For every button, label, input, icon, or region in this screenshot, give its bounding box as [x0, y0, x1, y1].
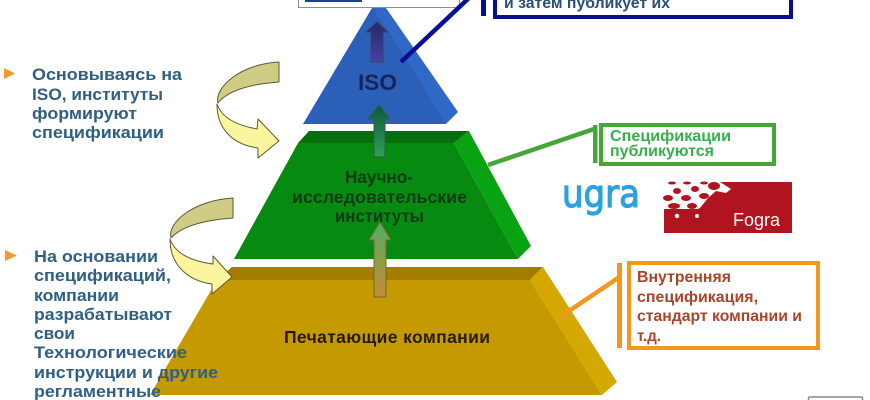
label: research institutes: Научно-: [345, 167, 413, 187]
text block: companies develop instructions: [5, 247, 218, 400]
text block: institutes form specifications: формируют: [32, 104, 137, 123]
arrow: institutes to ISO: [366, 22, 388, 62]
callout: internal specification: спецификация,: [637, 289, 758, 306]
label: research institutes: [292, 167, 467, 226]
panel: printing companies tier: [150, 267, 617, 395]
callout: internal specification: [617, 263, 818, 348]
label: ISO: ISO: [358, 70, 397, 95]
text block: institutes form specifications: спецификации: [32, 123, 164, 142]
callout: internal specification: т.д.: [637, 328, 661, 345]
callout: specifications are published: Спецификации: [610, 128, 731, 145]
callout: internal specification: Внутренняя: [637, 269, 731, 286]
logo: Fogra: [663, 182, 792, 233]
text block: companies develop instructions: Технологические: [34, 343, 187, 362]
label: research institutes: исследовательские: [292, 187, 467, 207]
connector: companies to orange box: [560, 278, 618, 317]
connector: institutes to green box: [488, 129, 594, 165]
text block: institutes form specifications: Основываясь на: [32, 65, 183, 84]
text block: institutes form specifications: [4, 65, 183, 142]
text block: institutes form specifications: ISO, институты: [32, 85, 163, 104]
connector: ISO to navy box: [401, 0, 470, 62]
curved arrow: ISO to institutes: [217, 62, 279, 158]
text block: companies develop instructions: разрабатывают: [34, 305, 172, 324]
callout: internal specification: стандарт компании и: [637, 308, 802, 325]
text block: companies develop instructions: инструкции и другие: [34, 363, 218, 382]
panel: ISO pyramid tier: [303, 8, 458, 124]
text block: companies develop instructions: компании: [34, 286, 119, 305]
curved arrow: institutes to companies: [170, 198, 233, 294]
logo: Fogra: Fogra: [733, 210, 781, 230]
top white box: [298, 0, 460, 8]
panel: research institutes tier: [234, 131, 531, 259]
arrow: ISO to institutes: [368, 105, 390, 157]
label: printing companies: Печатающие компании: [284, 327, 490, 347]
callout: specifications are published: [593, 125, 774, 164]
text block: companies develop instructions: На основании: [34, 247, 158, 266]
arrow: companies to institutes: [369, 222, 391, 297]
callout: specifications are published: публикуются: [610, 143, 714, 160]
small box bottom right: [808, 397, 862, 400]
text block: companies develop instructions: спецификаций,: [34, 266, 171, 285]
logo: ugra: ugra: [562, 172, 640, 216]
label: research institutes: институты: [335, 206, 424, 226]
callout: ISO publishes: [481, 0, 791, 17]
text block: companies develop instructions: свои: [34, 324, 75, 343]
